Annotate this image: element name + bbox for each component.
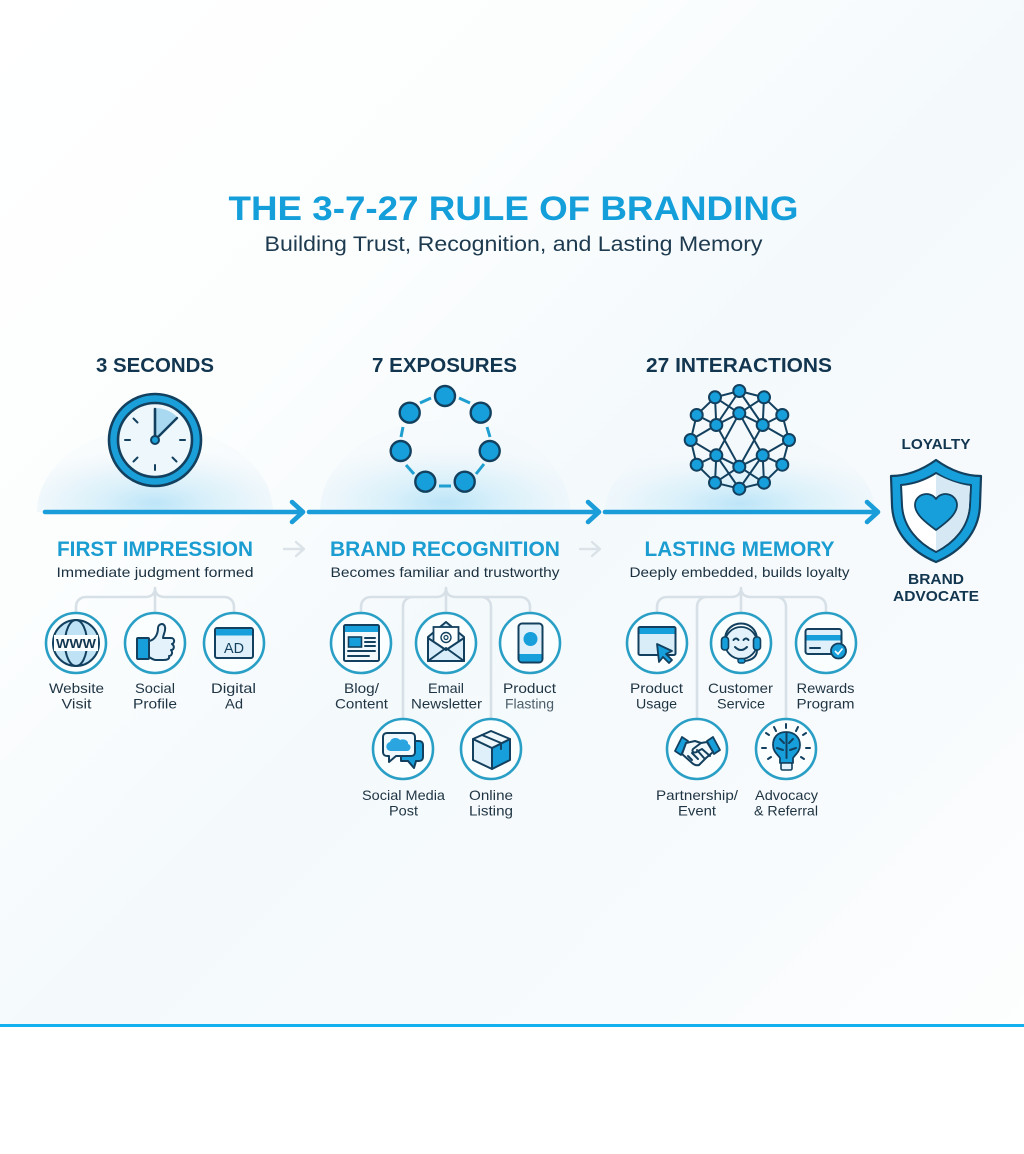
icon: digital ad (204, 613, 264, 673)
text: first impression description: Immediate judgment formed (56, 564, 253, 580)
label: partnership event: Partnership/ (656, 787, 738, 803)
icon: clock (109, 394, 201, 486)
label: social media post: Post (389, 802, 418, 818)
icon: digital ad: AD (224, 640, 244, 657)
label: website visit: Visit (62, 696, 92, 712)
label: blog content: Blog/ (344, 680, 379, 696)
label: brand advocate: BRAND (908, 571, 964, 588)
label: product floating: Product (503, 680, 556, 696)
label: product floating (503, 680, 556, 712)
label: email newsletter: Newsletter (411, 696, 482, 712)
label: product usage (630, 680, 683, 712)
label: blog content (335, 680, 388, 712)
label: loyalty: LOYALTY (902, 436, 970, 453)
label: advocacy and referral: & Referral (754, 802, 818, 818)
label: digital ad: Digital (211, 680, 256, 696)
icon: product usage (627, 613, 687, 673)
label: blog content: Content (335, 696, 388, 712)
icon: email newsletter (416, 613, 476, 673)
icon: seven exposure dots (391, 386, 500, 492)
heading: 27 interactions: 27 INTERACTIONS (646, 355, 832, 377)
label: website visit (49, 680, 104, 712)
label: email newsletter (411, 680, 482, 712)
label: brand advocate (893, 571, 979, 605)
icon: website visit (46, 613, 106, 673)
label: product usage: Product (630, 680, 683, 696)
icon: loyalty shield (891, 460, 981, 562)
icon: social profile (125, 613, 185, 673)
panel: 7 exposures glow (320, 420, 570, 512)
label: social profile (133, 680, 177, 712)
text: lasting memory description: Deeply embedded, builds loyalty (630, 564, 850, 580)
label: product usage: Usage (636, 696, 677, 712)
label: brand advocate: ADVOCATE (893, 588, 979, 605)
heading: first impression: FIRST IMPRESSION (57, 538, 253, 561)
heading: lasting memory: LASTING MEMORY (644, 538, 834, 561)
label: product floating: Flasting (505, 696, 554, 712)
label: social media post: Social Media (362, 787, 445, 803)
icon: partnership handshake (667, 719, 727, 779)
panel: 27 interactions glow (605, 430, 875, 512)
heading: brand recognition: BRAND RECOGNITION (330, 538, 560, 561)
arrow: grey connector two (580, 542, 600, 556)
label: email newsletter: Email (428, 680, 464, 696)
text: brand recognition description: Becomes familiar and trustworthy (330, 564, 560, 580)
panel: 3 seconds glow (37, 427, 273, 512)
icon: interaction network (685, 385, 795, 495)
subtitle: Building Trust, Recognition, and Lasting Memory (264, 233, 763, 256)
icon: product floating (500, 613, 560, 673)
label: digital ad (211, 680, 256, 712)
icon: social media post (373, 719, 433, 779)
label: social profile: Social (135, 680, 175, 696)
label: social profile: Profile (133, 696, 177, 712)
arrow: second stage (309, 502, 599, 522)
label: website visit: Website (49, 680, 104, 696)
arrow: third stage (605, 502, 878, 522)
arrow: grey connector one (284, 542, 304, 556)
icon: website visit: WWW (56, 636, 97, 651)
label: digital ad: Ad (225, 696, 243, 712)
title: THE 3-7-27 RULE OF BRANDING (228, 190, 798, 228)
arrow: first stage (45, 502, 303, 522)
label: customer service: Service (717, 696, 765, 712)
connector: brand recognition tree (361, 588, 530, 718)
label: customer service (708, 680, 773, 712)
label: rewards program: Rewards (796, 680, 854, 696)
heading: 7 exposures: 7 EXPOSURES (372, 355, 517, 377)
connector: lasting memory tree (657, 588, 826, 718)
label: rewards program (796, 680, 854, 712)
label: partnership event (656, 787, 738, 818)
label: advocacy and referral: Advocacy (755, 787, 818, 803)
label: partnership event: Event (678, 802, 716, 818)
label: advocacy and referral (754, 787, 818, 818)
label: social media post (362, 787, 445, 818)
icon: online listing (461, 719, 521, 779)
label: online listing: Listing (469, 802, 513, 818)
icon: rewards program (796, 613, 856, 673)
label: rewards program: Program (796, 696, 854, 712)
label: customer service: Customer (708, 680, 773, 696)
heading: 3 seconds: 3 SECONDS (96, 355, 214, 377)
connector: first impression tree (76, 588, 234, 612)
label: online listing (469, 787, 513, 818)
icon: advocacy brain bulb (756, 719, 816, 779)
icon: customer service (711, 613, 771, 673)
icon: blog content (331, 613, 391, 673)
label: online listing: Online (469, 787, 513, 803)
